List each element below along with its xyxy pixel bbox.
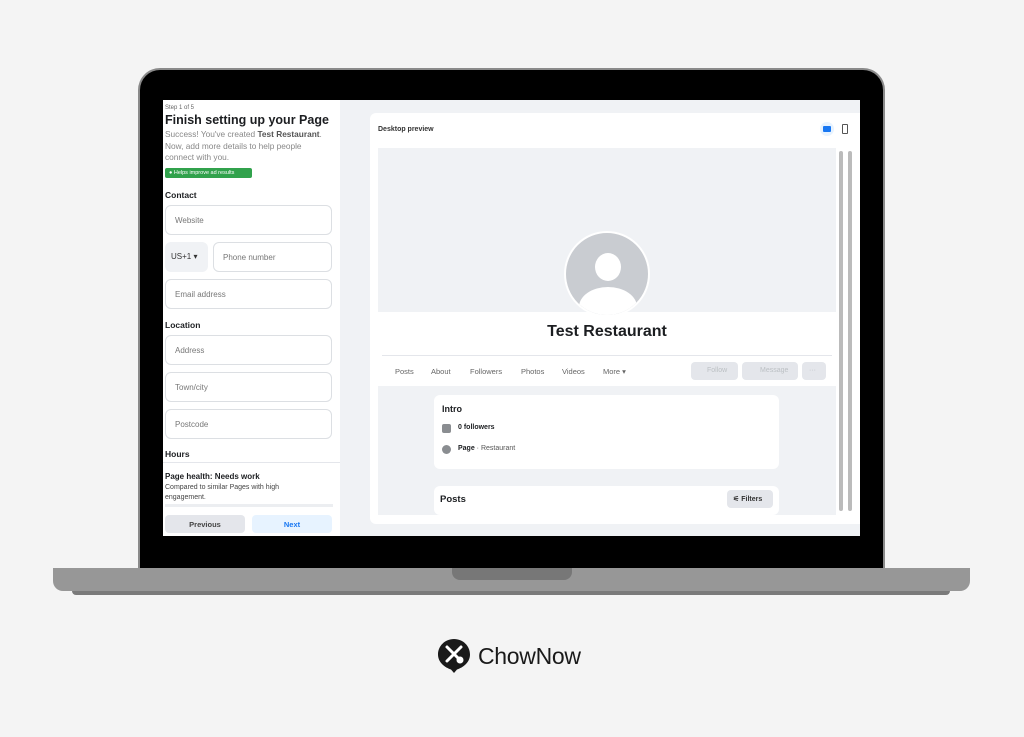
- logo: ChowNow: ChowNow: [478, 643, 581, 669]
- form labels and inputs: Location: [165, 320, 200, 330]
- screen: preview area: [340, 100, 860, 536]
- scrollbars: [839, 151, 843, 511]
- preview card: [370, 113, 860, 524]
- page health footer: Previous: [189, 520, 221, 529]
- form labels and inputs: US+1 ▾: [171, 252, 197, 261]
- facebook page preview: About: [431, 367, 451, 376]
- avatar: [564, 231, 650, 317]
- icon: desktop/mobile toggle: [820, 122, 848, 136]
- facebook page preview: Follow: [707, 367, 727, 374]
- form labels and inputs: Town/city: [175, 383, 208, 392]
- intro card: Page · Restaurant: [458, 445, 515, 452]
- laptop bezel: [138, 68, 885, 570]
- page health footer: Compared to similar Pages with high: [165, 484, 279, 491]
- facebook page preview: More ▾: [603, 367, 626, 376]
- preview card: Desktop preview: [378, 126, 434, 133]
- form labels and inputs: Website: [175, 216, 204, 225]
- facebook page preview: ···: [809, 367, 816, 374]
- logo: ChowNow: [438, 639, 581, 673]
- screen: left setup panel: Now, add more details to help people: [165, 140, 302, 150]
- screen: left setup panel: ● Helps improve ad results: [169, 170, 234, 176]
- posts card: [434, 486, 779, 515]
- form labels and inputs: [165, 190, 332, 459]
- cover: [378, 148, 836, 312]
- screen: left setup panel: Step 1 of 5: [165, 105, 194, 111]
- form labels and inputs: Email address: [175, 290, 226, 299]
- posts card: ⚟ Filters: [733, 496, 762, 503]
- screen: left setup panel: Success! You've created Test Restaurant.: [165, 129, 322, 139]
- facebook page preview: Photos: [521, 367, 544, 376]
- notch: [452, 568, 572, 580]
- intro card: Intro: [442, 404, 462, 414]
- page health footer: engagement.: [165, 494, 206, 501]
- form labels and inputs: Hours: [165, 449, 190, 459]
- form labels and inputs: Phone number: [223, 253, 275, 262]
- intro card: 0 followers: [458, 424, 495, 431]
- posts card: Posts: [440, 494, 466, 505]
- intro card: [434, 395, 779, 469]
- facebook page preview: [378, 148, 836, 515]
- form labels and inputs: Contact: [165, 190, 197, 200]
- facebook page preview: Test Restaurant: [547, 323, 667, 340]
- screen: left setup panel: Finish setting up your Page: [165, 113, 329, 127]
- page health footer: Next: [284, 520, 300, 529]
- page health footer: Page health: Needs work: [165, 472, 260, 481]
- screen: left setup panel: connect with you.: [165, 152, 229, 162]
- icon: pin with utensils: [438, 639, 470, 673]
- form labels and inputs: Address: [175, 346, 204, 355]
- form labels and inputs: Postcode: [175, 420, 208, 429]
- facebook page preview: Message: [760, 367, 788, 374]
- tabs: Posts: [395, 367, 414, 376]
- page health footer: [163, 462, 340, 536]
- laptop base: [72, 586, 950, 595]
- facebook page preview: Followers: [470, 367, 502, 376]
- facebook page preview: Videos: [562, 367, 585, 376]
- screen: left setup panel: [163, 100, 340, 536]
